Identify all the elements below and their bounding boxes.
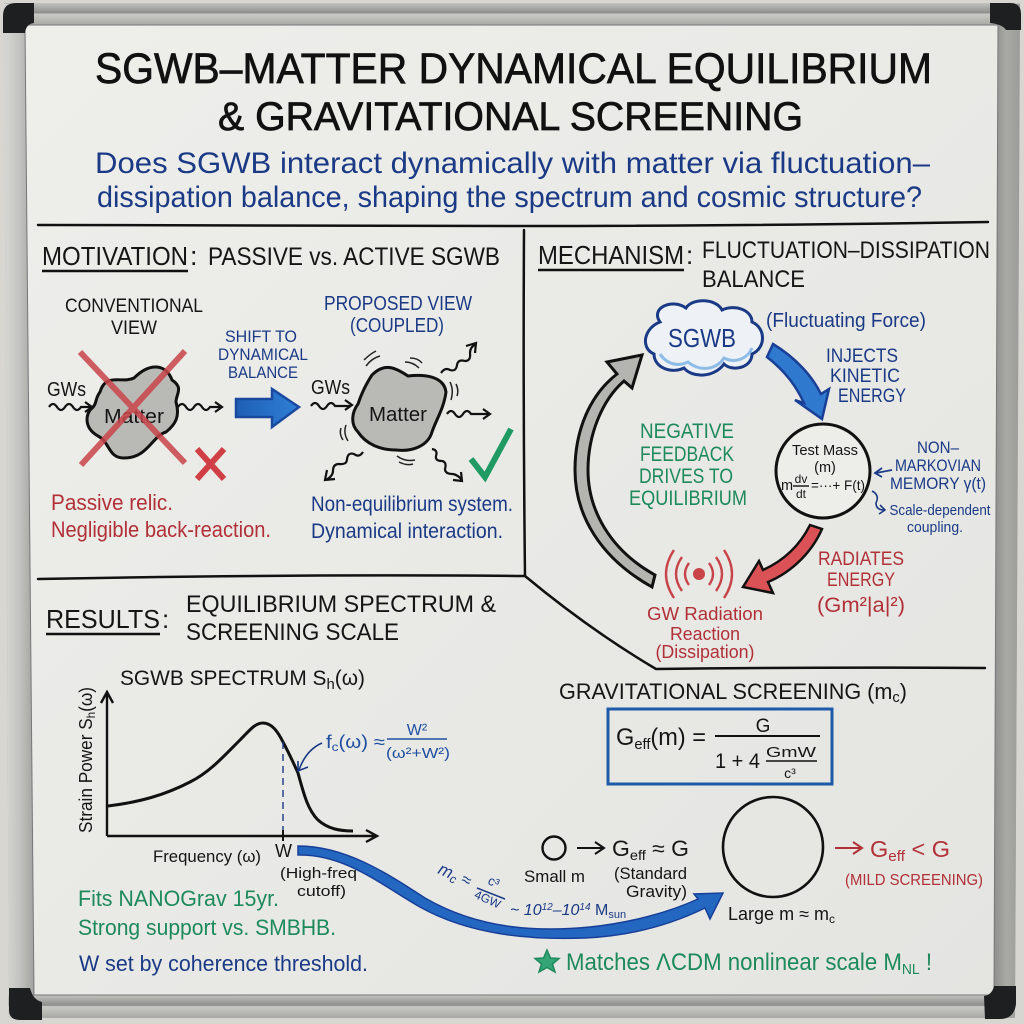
icon: matter crossed out: Matter <box>104 406 164 428</box>
emitted gravitational waves <box>325 343 490 481</box>
annotation: cutoff function: (ω²+W²) <box>386 745 450 762</box>
chart: SGWB spectrum: Strain Power S <box>76 713 96 833</box>
non-markovian memory: MEMORY γ(t) <box>890 475 986 493</box>
chart: SGWB spectrum: cutoff) <box>297 883 346 900</box>
small mass: Small m <box>524 867 585 886</box>
test mass circle: dv <box>795 472 807 486</box>
icon: SGWB cloud: SGWB <box>668 323 736 353</box>
gravitational screening heading: ) <box>900 679 907 704</box>
arrow: blue curve to large mass <box>298 846 723 938</box>
negative feedback: FEEDBACK <box>640 443 734 466</box>
subtitle question: dissipation balance, shaping the spectrum and cosmic structure? <box>97 181 922 214</box>
injects kinetic energy: INJECTS <box>826 346 898 367</box>
results heading: SCREENING SCALE <box>186 619 399 646</box>
fits nanograv <box>78 886 336 940</box>
passive relic text <box>51 490 271 542</box>
test mass circle: Test Mass <box>792 443 858 459</box>
icon: matter active <box>340 351 458 465</box>
equation box <box>608 709 832 784</box>
annotation: cutoff function: f <box>326 732 331 752</box>
matches lambda CDM callout: NL <box>902 961 920 978</box>
negative feedback <box>629 420 747 510</box>
chart: SGWB spectrum: (ω) <box>76 687 96 712</box>
title: SGWB–MATTER DYNAMICAL EQUILIBRIUM <box>95 45 932 93</box>
chart: SGWB spectrum: h <box>84 712 98 718</box>
critical mass formula: –10 <box>552 902 580 919</box>
annotation: cutoff function: W² <box>407 722 428 739</box>
shift label: DYNAMICAL <box>218 345 308 364</box>
arrow: scale-dependent <box>872 491 885 514</box>
incoming waves active with GWs label <box>311 377 352 410</box>
annotation: cutoff function: (ω) ≈ <box>339 732 385 752</box>
large mass circle <box>723 797 823 897</box>
mechanism heading <box>538 237 990 293</box>
incoming waves with GWs label: GWs <box>47 379 86 401</box>
arrow: small mass to standard gravity <box>577 842 604 854</box>
critical mass formula: m <box>435 859 456 882</box>
chart: SGWB spectrum: Frequency (ω) <box>153 847 261 866</box>
results heading <box>46 591 496 646</box>
incoming waves with GWs label <box>47 379 92 412</box>
non-markovian memory <box>890 439 986 493</box>
panel: results <box>46 591 983 978</box>
large mass label: Large m ≈ m <box>728 904 829 924</box>
chart: SGWB spectrum <box>76 687 377 900</box>
reduced G relation: < G <box>905 836 950 862</box>
standard gravity relation: ≈ G <box>646 836 689 861</box>
title: & GRAVITATIONAL SCREENING <box>218 95 803 139</box>
icon: SGWB cloud <box>645 301 762 375</box>
gw radiation reaction: GW Radiation <box>647 603 763 624</box>
radiates energy <box>817 549 905 617</box>
equation box: GmW <box>766 744 817 761</box>
standard gravity relation: eff <box>630 847 646 863</box>
injects kinetic energy: KINETIC <box>830 366 900 387</box>
radiates energy: RADIATES <box>818 549 904 570</box>
gravitational screening heading: GRAVITATIONAL SCREENING (m <box>559 679 898 704</box>
title <box>95 45 932 139</box>
scale-dependent coupling: coupling. <box>907 519 963 536</box>
subtitle question: Does SGWB interact dynamically with matter via fluctuation– <box>95 147 930 180</box>
spectrum chart title: (ω) <box>335 667 365 690</box>
mechanism heading: MECHANISM <box>538 240 684 270</box>
test mass circle <box>776 424 870 518</box>
negative feedback: NEGATIVE <box>640 420 734 443</box>
arrow: red radiates <box>743 525 822 593</box>
equation box: c³ <box>784 765 796 781</box>
motivation heading <box>42 241 500 271</box>
negative feedback: EQUILIBRIUM <box>629 487 747 510</box>
critical mass formula: 12 <box>542 902 553 913</box>
reduced G relation: eff <box>888 848 906 865</box>
results heading: RESULTS <box>46 604 160 634</box>
subtitle question <box>95 147 930 214</box>
non-markovian memory: NON– <box>917 439 960 457</box>
radiates energy: (Gm²|a|²) <box>817 594 905 617</box>
conventional view label: VIEW <box>111 318 157 339</box>
test mass circle: m <box>781 478 793 494</box>
icon: green check <box>471 429 511 477</box>
scale-dependent coupling <box>890 502 991 536</box>
spectrum chart title: SGWB SPECTRUM S <box>120 667 328 690</box>
chart: SGWB spectrum: (High-freq <box>280 865 357 882</box>
coherence threshold: W set by coherence threshold. <box>79 951 368 976</box>
matches lambda CDM callout: ! <box>920 949 932 976</box>
matches lambda CDM callout: Matches ΛCDM nonlinear scale M <box>566 949 929 976</box>
fluctuating force label: (Fluctuating Force) <box>766 310 926 332</box>
chart: SGWB spectrum: W <box>275 841 292 861</box>
non-equilibrium text: Non-equilibrium system. <box>311 493 513 516</box>
gw radiation reaction: (Dissipation) <box>656 641 754 662</box>
outgoing wave <box>178 402 222 412</box>
reduced G relation <box>845 836 983 889</box>
motivation heading: MOTIVATION <box>42 241 188 271</box>
test mass circle: (m) <box>814 460 836 476</box>
motivation heading: PASSIVE vs. ACTIVE SGWB <box>208 243 500 271</box>
conventional view label <box>65 296 203 339</box>
critical mass formula: ~ 10 <box>510 902 542 919</box>
panel: mechanism <box>538 237 991 662</box>
critical mass formula <box>435 859 626 921</box>
test mass circle: dt <box>796 487 807 501</box>
proposed view label: (COUPLED) <box>350 315 444 337</box>
injects kinetic energy: ENERGY <box>838 386 906 407</box>
panel: motivation <box>42 241 513 543</box>
gw radiation reaction <box>647 603 763 662</box>
results heading: EQUILIBRIUM SPECTRUM & <box>186 591 496 618</box>
scale-dependent coupling: Scale-dependent <box>890 502 991 519</box>
reduced G relation: (MILD SCREENING) <box>845 872 983 889</box>
annotation: cutoff function <box>298 722 450 771</box>
shift label: BALANCE <box>228 363 298 382</box>
critical mass formula: ≈ <box>454 868 475 891</box>
motivation heading: : <box>190 241 198 271</box>
arrow: blue injects <box>767 344 829 419</box>
icon: red x <box>197 449 224 479</box>
arrow: red to reduced G <box>835 842 862 854</box>
critical mass formula: c³ <box>486 873 502 891</box>
fits nanograv: Fits NANOGrav 15yr. <box>78 886 279 911</box>
arrow: memory <box>875 468 892 477</box>
gw radiation reaction: Reaction <box>670 623 740 644</box>
mechanism heading: BALANCE <box>702 266 805 293</box>
equation box: 1 + 4 <box>715 750 760 773</box>
critical mass formula: 14 <box>579 902 591 913</box>
test mass circle: =···+ F(t) <box>811 477 865 493</box>
injects kinetic energy <box>826 346 906 407</box>
results heading: : <box>162 604 169 634</box>
conventional view label: CONVENTIONAL <box>65 296 203 317</box>
non-equilibrium text: Dynamical interaction. <box>311 520 503 543</box>
equation box: (m) = <box>650 724 706 751</box>
incoming waves active with GWs label: GWs <box>311 377 350 399</box>
equation box: eff <box>634 736 651 753</box>
annotation: cutoff function: c <box>332 740 339 754</box>
passive relic text: Negligible back-reaction. <box>51 517 271 542</box>
equation box: G <box>616 724 635 751</box>
small mass <box>524 836 585 886</box>
critical mass formula: sun <box>608 909 626 921</box>
standard gravity relation: (Standard <box>614 864 687 883</box>
proposed view label <box>324 293 472 337</box>
mechanism heading: : <box>686 240 693 270</box>
standard gravity relation: Gravity) <box>626 882 687 901</box>
shift label: SHIFT TO <box>225 327 297 346</box>
icon: matter active: Matter <box>369 404 427 426</box>
radiates energy: ENERGY <box>827 570 895 591</box>
fits nanograv: Strong support vs. SMBHB. <box>78 915 336 940</box>
critical mass formula: c <box>448 871 459 887</box>
large mass label: c <box>829 912 835 926</box>
shift label <box>218 327 308 382</box>
standard gravity relation: G <box>612 836 629 861</box>
negative feedback: DRIVES TO <box>639 465 733 488</box>
arrow: grey feedback <box>575 355 655 587</box>
non-equilibrium text <box>311 493 513 543</box>
non-markovian memory: MARKOVIAN <box>895 457 981 475</box>
critical mass formula: M <box>591 902 608 919</box>
critical mass formula: 4GW <box>472 887 504 912</box>
passive relic text: Passive relic. <box>51 490 173 515</box>
gravitational screening heading: c <box>892 689 900 706</box>
proposed view label: PROPOSED VIEW <box>324 293 472 315</box>
arrow: shift <box>236 389 299 427</box>
icon: radiation source <box>666 550 732 598</box>
reduced G relation: G <box>870 836 888 862</box>
icon: matter crossed out <box>80 351 185 465</box>
equation box: G <box>756 716 770 737</box>
spectrum chart title: h <box>326 676 335 693</box>
standard gravity relation <box>612 836 689 901</box>
mechanism heading: FLUCTUATION–DISSIPATION <box>702 237 990 264</box>
